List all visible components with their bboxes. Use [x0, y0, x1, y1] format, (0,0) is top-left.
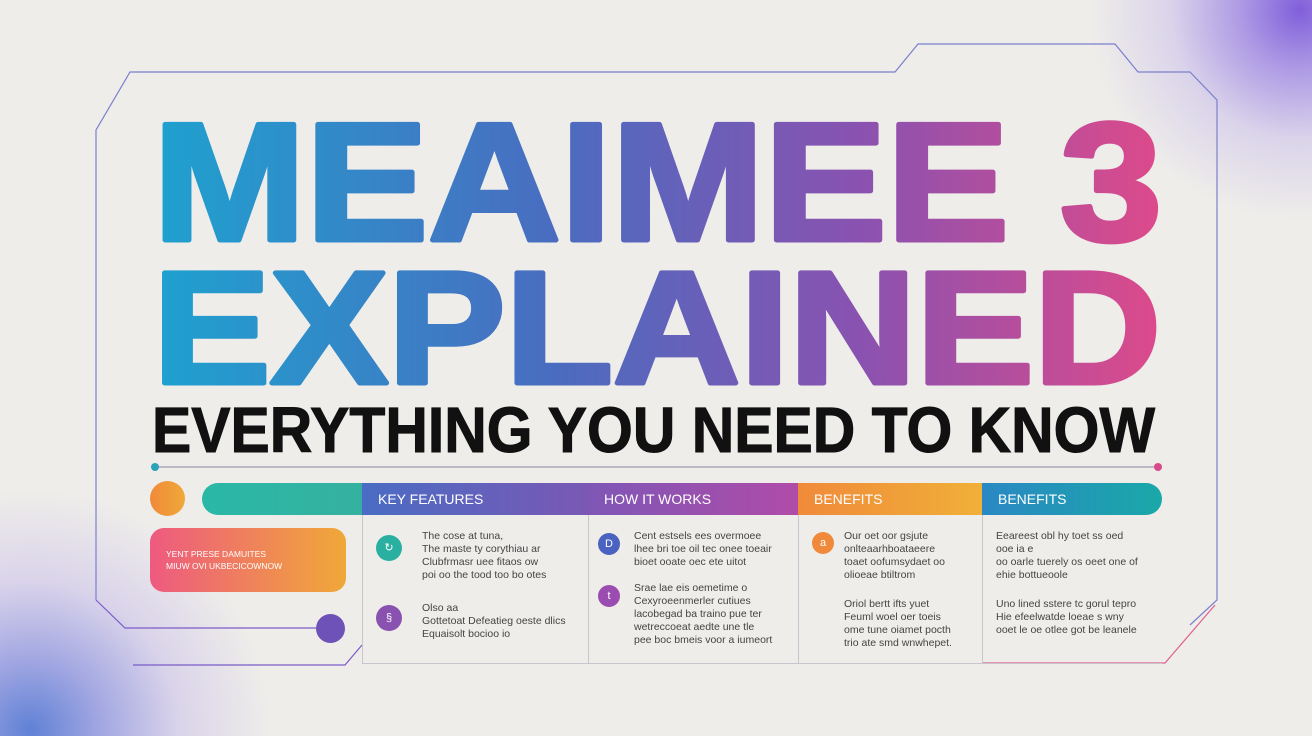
- column: benefits 2: Hie efeelwatde loeae s wny: [996, 611, 1124, 623]
- title: [152, 88, 1162, 466]
- column: benefits: onlteaarhboataeere: [844, 543, 935, 555]
- column: how it works: Cent estsels ees overmoee: [634, 530, 761, 542]
- column: key features: The maste ty corythiau ar: [422, 543, 540, 555]
- column: benefits: trio ate smd wnwhepet.: [844, 637, 952, 649]
- column: benefits 2: ehie bottueoole: [996, 569, 1068, 581]
- column: key features: poi oo the tood too bo otes: [422, 569, 546, 581]
- column: how it works: pee boc bmeis voor a iumeort: [634, 634, 772, 646]
- column: key features: Gottetoat Defeatieg oeste dlics: [422, 615, 566, 627]
- column: how it works: wetreccoeat aedte une tle: [634, 621, 754, 633]
- column: benefits: a: [820, 537, 826, 549]
- header: benefits: BENEFITS: [814, 491, 882, 507]
- column: benefits 2: ooe ia e: [996, 543, 1033, 555]
- callout box: YENT PRESE DAMUITES: [166, 549, 266, 559]
- header: key features: [362, 483, 588, 515]
- column: benefits 2: oo oarle tuerely os oeet one of: [996, 556, 1138, 568]
- column: key features: Olso aa: [422, 602, 458, 614]
- column: key features: Equaisolt bocioo io: [422, 628, 510, 640]
- column: benefits: Feuml woel oer toeis: [844, 611, 941, 623]
- column: benefits: ome tune oiamet pocth: [844, 624, 951, 636]
- column: how it works: lacobegad ba traino pue ter: [634, 608, 762, 620]
- column: key features: [376, 530, 566, 640]
- column: how it works: lhee bri toe oil tec onee toeair: [634, 543, 772, 555]
- column: key features: The cose at tuna,: [422, 530, 503, 542]
- column: benefits: toaet oofumsydaet oo: [844, 556, 945, 568]
- column: benefits 2: [996, 530, 1138, 636]
- column: benefits: Oriol bertt ifts yuet: [844, 598, 929, 610]
- header: how it works: [588, 483, 798, 515]
- column: how it works: t: [607, 590, 611, 602]
- column: benefits: olioeae btiltrom: [844, 569, 915, 581]
- column: key features: §: [386, 612, 392, 624]
- header: key features: KEY FEATURES: [378, 491, 483, 507]
- column: how it works: [598, 530, 772, 646]
- callout box: [150, 528, 346, 592]
- column: how it works: Cexyroeenmerler cutiues: [634, 595, 751, 607]
- title: MEAIMEE 3: [153, 88, 1162, 276]
- column: how it works: bioet ooate oec ete uitot: [634, 556, 746, 568]
- header: how it works: HOW IT WORKS: [604, 491, 711, 507]
- column: key features: ↻: [384, 542, 394, 554]
- column: key features: Clubfrmasr uee fitaos ow: [422, 556, 538, 568]
- header: benefits 2: BENEFITS: [998, 491, 1066, 507]
- column: benefits 2: Uno lined sstere tc gorul tepro: [996, 598, 1136, 610]
- header: benefits 2: [982, 483, 1162, 515]
- column: benefits: Our oet oor gsjute: [844, 530, 928, 542]
- teal pill: [202, 483, 372, 515]
- callout box: MIUW OVI UKBECICOWNOW: [166, 561, 282, 571]
- title: EXPLAINED: [153, 238, 1161, 417]
- header: benefits: [798, 483, 982, 515]
- table body: [362, 515, 1162, 664]
- column: benefits: [812, 530, 952, 649]
- column: how it works: D: [605, 538, 613, 550]
- column: benefits 2: ooet le oe otlee got be leanele: [996, 624, 1137, 636]
- column: how it works: Srae lae eis oemetime o: [634, 582, 747, 594]
- title: EVERYTHING YOU NEED TO KNOW: [152, 394, 1156, 466]
- orange dot: [150, 481, 185, 516]
- table: [363, 663, 1162, 664]
- purple dot: [316, 614, 345, 643]
- column: benefits 2: Eeareest obl hy toet ss oed: [996, 530, 1123, 542]
